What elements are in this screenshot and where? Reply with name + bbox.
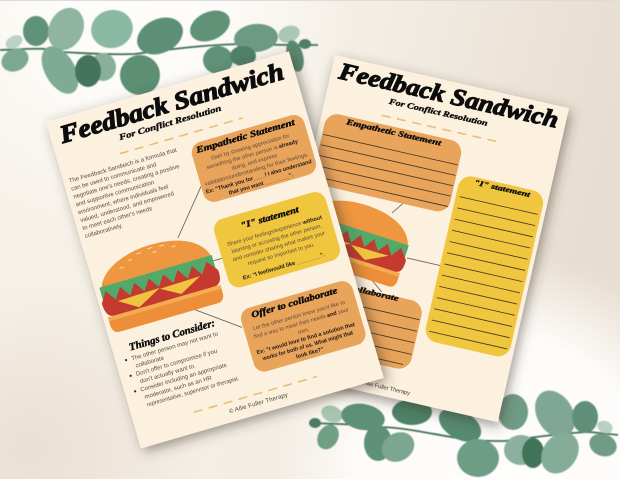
top eucalyptus branch <box>0 2 318 100</box>
panel: blank worksheet page <box>262 55 569 422</box>
heading: worksheet title: Feedback Sandwich <box>336 58 561 134</box>
text block: introduction: can be used to communicate and <box>71 162 157 193</box>
panel: I statement blank box: "I" statement <box>473 178 532 199</box>
text block: things to consider: representative, supervisor or therapist. <box>146 376 240 409</box>
text block: introduction: The Feedback Sandwich is a formula that <box>68 148 178 185</box>
text block: things to consider <box>121 316 240 411</box>
text block: introduction: valued, understood, and empowered <box>80 191 175 224</box>
panel: offer to collaborate blank box <box>275 270 425 371</box>
text block: things to consider: Things to Consider: <box>128 318 216 353</box>
text block: things to consider: collaborate <box>135 355 165 370</box>
panel: empathetic statement blank box: Empathetic Statement <box>344 117 443 148</box>
text block: introduction: to meet each other's needs <box>82 206 153 232</box>
panel: offer to collaborate blank box: Offer to collaborate <box>312 275 400 303</box>
panel: empathetic statement: doing, and express <box>231 153 278 172</box>
panel: empathetic statement: something the other person is already <box>206 139 300 171</box>
panel: I statement: request so important to you. <box>247 242 316 267</box>
panel: offer to collaborate: find a way to meet their needs and your <box>253 307 350 340</box>
panel: offer to collaborate: Offer to collaborate <box>250 285 338 320</box>
text block: introduction: environment, where individuals feel <box>77 184 169 216</box>
panel: offer to collaborate: works for both of us. What might that <box>261 330 354 363</box>
credit: Allie Fuller Therapy <box>362 380 411 397</box>
panel: offer to collaborate: look like?" <box>296 347 325 360</box>
panel: empathetic statement blank box <box>311 112 464 214</box>
heading: guide title: Feedback Sandwich <box>56 58 287 149</box>
text block: introduction: negotiate one's needs, creating a positive <box>73 164 181 201</box>
text block: introduction <box>68 148 194 240</box>
text block: things to consider: The other person may not want to <box>131 331 220 362</box>
bottom eucalyptus branch <box>309 383 620 479</box>
panel: I statement <box>211 189 343 290</box>
subheading: worksheet subtitle: For Conflict Resolution <box>387 96 489 128</box>
panel: offer to collaborate: Let the other person know you'd like to <box>252 300 346 332</box>
panel: empathetic statement: Start by showing appreciation for <box>210 133 290 162</box>
panel: empathetic statement <box>189 112 319 205</box>
panel: offer to collaborate: own. <box>297 327 311 336</box>
subheading: guide subtitle: For Conflict Resolution <box>117 103 223 142</box>
panel: empathetic statement: validation/understanding for their feelings. <box>204 152 310 188</box>
panel: I statement: blaming or accusing the other person, <box>231 223 323 255</box>
panel: completed guide page <box>46 51 384 448</box>
credit: © Allie Fuller Therapy <box>228 392 289 415</box>
text block: things to consider: Consider including an appropriate <box>140 363 228 394</box>
panel: offer to collaborate <box>238 278 368 374</box>
panel: empathetic statement: Empathetic Statement <box>194 117 296 155</box>
panel: offer to collaborate: Ex: "I would love to find a solution that <box>256 322 356 356</box>
icon: burger on worksheet <box>288 187 418 289</box>
panel: I statement blank box <box>423 174 546 359</box>
panel: I statement: Share your feelings/experience without <box>226 215 323 248</box>
text block: things to consider: moderator, such as an HR <box>144 375 213 401</box>
text block: introduction: and supportive communication <box>75 180 155 208</box>
panel: empathetic statement: that you want ________". <box>228 172 294 197</box>
panel: empathetic statement: Ex: "Thank you for____! I also understand <box>205 159 313 196</box>
panel: I statement: and consider sharing what makes your <box>232 231 326 263</box>
text block: introduction: collaboratively. <box>84 223 124 240</box>
panel: I statement: "I" statement <box>239 204 300 231</box>
icon: burger <box>90 229 227 334</box>
text block: things to consider: don't actually want to. <box>140 363 197 385</box>
panel: I statement: Ex: "I feel/would like ________". <box>242 252 326 282</box>
text block: things to consider: Don't offer to compromise if you <box>135 349 218 378</box>
